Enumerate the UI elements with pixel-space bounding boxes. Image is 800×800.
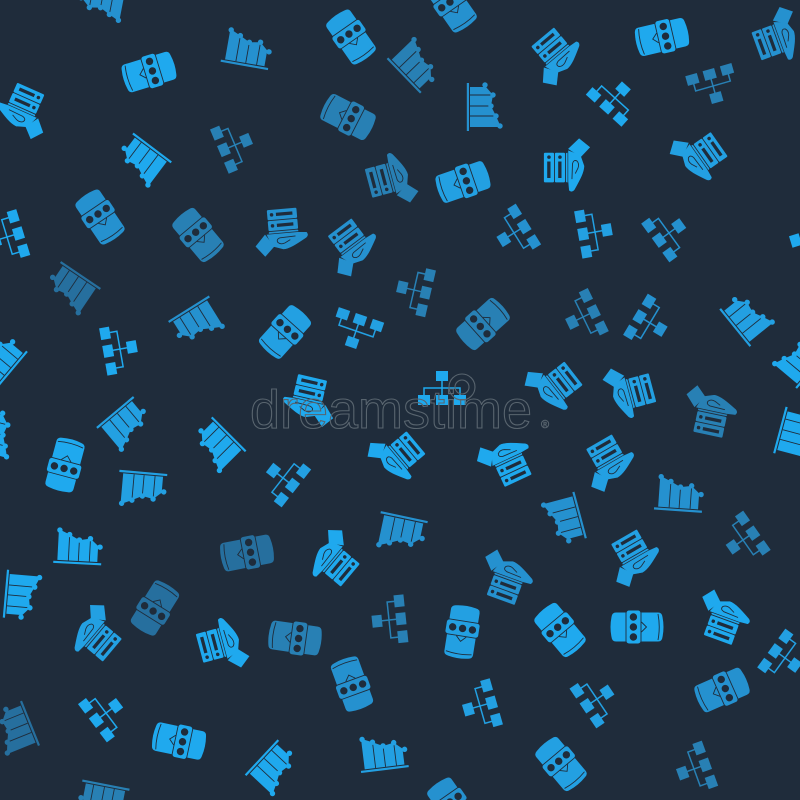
icon: network hierarchy (487, 204, 541, 262)
icon: hand with server (279, 372, 341, 429)
icon: jar (531, 733, 591, 795)
icon: jar (71, 186, 129, 248)
icon: network hierarchy (0, 209, 30, 265)
icon: area chart (387, 34, 446, 94)
icon: jar (610, 610, 664, 644)
icon: area chart (0, 406, 20, 462)
icon: jar (691, 664, 753, 716)
icon: area chart (769, 328, 800, 389)
icon: area chart (75, 779, 130, 800)
icon: area chart (3, 570, 43, 621)
icon: area chart (221, 26, 275, 70)
icon: hand with server (193, 613, 252, 677)
icon: network hierarchy (392, 263, 436, 317)
icon: jar (530, 599, 590, 661)
icon: area chart (467, 82, 503, 131)
icon: hand with server (574, 430, 643, 496)
icon: hand with server (519, 350, 589, 421)
icon: area chart (0, 700, 40, 759)
icon: jar (127, 577, 183, 639)
icon: network hierarchy (641, 204, 697, 262)
icon: hand with server (472, 429, 540, 493)
icon: network hierarchy (328, 307, 384, 355)
icon: network hierarchy (757, 629, 800, 687)
icon: network hierarchy (255, 449, 311, 507)
icon: hand with server (600, 359, 659, 423)
icon: area chart (245, 739, 304, 799)
icon: hand with server (544, 138, 590, 192)
icon: hand with server (61, 598, 131, 669)
icon: jar (441, 603, 483, 661)
icon: network hierarchy (670, 741, 718, 797)
icon: area chart (773, 406, 800, 462)
icon: network hierarchy (99, 322, 141, 376)
icon: network hierarchy (557, 288, 609, 346)
icon: area chart (111, 132, 172, 190)
icon: jar (327, 653, 377, 715)
icon: network hierarchy (586, 69, 644, 127)
icon: network hierarchy (418, 371, 466, 405)
icon: jar (432, 157, 494, 207)
icon: hand with server (299, 523, 369, 594)
icon: hand with server (0, 79, 58, 143)
icon: area chart (0, 328, 28, 389)
icon: jar (317, 90, 379, 144)
icon: area chart (373, 511, 429, 556)
icon: network hierarchy (784, 209, 800, 265)
icon: jar (452, 294, 514, 354)
icon: network hierarchy (370, 594, 408, 646)
icon: network hierarchy (685, 63, 741, 109)
icon: hand with server (252, 207, 310, 258)
icon: area chart (96, 396, 157, 455)
icon: hand with server (599, 525, 668, 591)
icon: hand with server (473, 547, 539, 608)
icon: area chart (187, 416, 246, 476)
icon: jar (218, 531, 276, 575)
icon: area chart (167, 296, 228, 352)
icon: network hierarchy (78, 684, 134, 742)
icon: area chart (357, 731, 409, 773)
watermark: ® (541, 419, 549, 431)
icon: jar (119, 48, 179, 96)
icon: hand with server (362, 420, 432, 491)
icon: hand with server (362, 148, 421, 212)
icon: area chart (75, 0, 130, 24)
icon: network hierarchy (574, 205, 616, 259)
icon: jar (255, 301, 315, 363)
icon: hand with server (747, 3, 800, 69)
icon: network hierarchy (623, 294, 677, 352)
icon: hand with server (520, 21, 591, 91)
icon: jar (632, 14, 692, 60)
icon: area chart (654, 474, 705, 513)
icon: network hierarchy (715, 511, 771, 569)
icon: network hierarchy (210, 116, 260, 174)
icon: area chart (540, 492, 587, 548)
icon: jar (322, 6, 380, 68)
icon: hand with server (316, 213, 387, 282)
icon: jar (266, 617, 324, 659)
icon: area chart (116, 470, 168, 510)
icon: jar (42, 435, 88, 495)
icon: network hierarchy (457, 678, 503, 734)
watermark: dreamstime (250, 380, 532, 440)
icon: jar (423, 774, 481, 800)
icon: area chart (719, 286, 777, 347)
icon: jar (150, 719, 208, 763)
icon: area chart (53, 527, 104, 565)
icon: network hierarchy (569, 670, 625, 728)
icon: hand with server (665, 120, 733, 191)
icon: jar (168, 204, 228, 266)
icon: area chart (41, 261, 101, 318)
icon: hand with server (690, 587, 756, 648)
icon: hand with server (679, 383, 741, 440)
icon: jar (423, 0, 481, 36)
